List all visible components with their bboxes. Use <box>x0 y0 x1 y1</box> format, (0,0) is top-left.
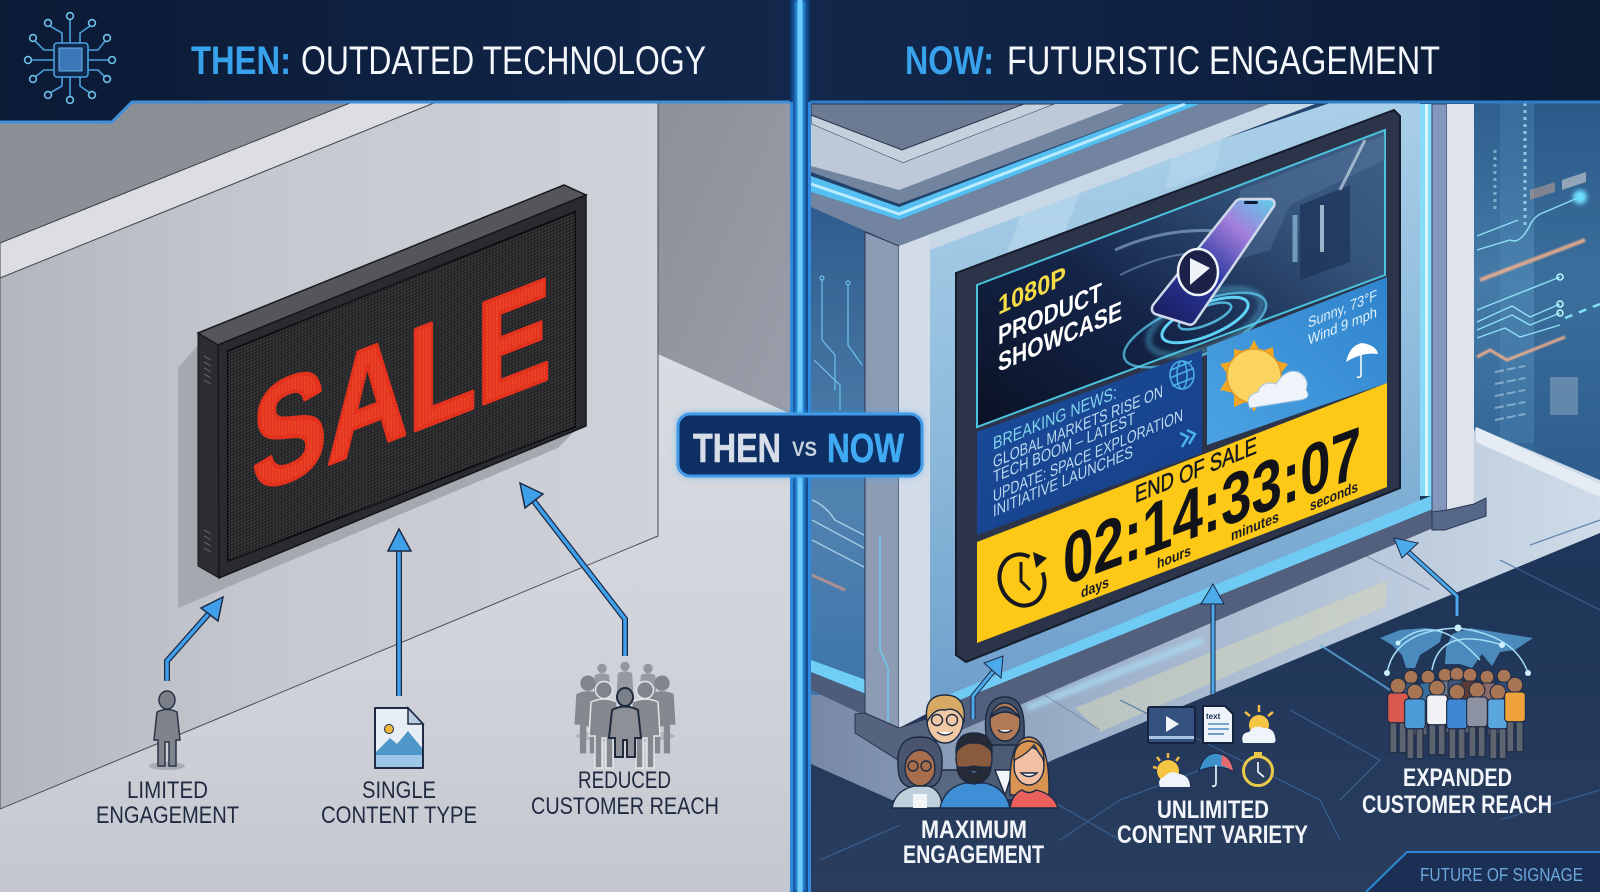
panel: breaking news: BREAKING NEWS: <box>993 382 1117 454</box>
icon: white umbrella <box>1346 343 1378 377</box>
floor circuit traces <box>820 520 1600 860</box>
label: single content type: CONTENT TYPE <box>321 802 477 829</box>
panel: countdown: 02:14:33:07 <box>1063 411 1361 601</box>
panel: product showcase <box>977 130 1385 427</box>
label: limited engagement: ENGAGEMENT <box>96 802 239 829</box>
label: maximum engagement: ENGAGEMENT <box>903 841 1044 869</box>
corridor structures <box>1115 135 1385 280</box>
sign shadow <box>178 190 586 608</box>
sign vents <box>204 356 211 552</box>
icon: video player <box>1148 707 1195 743</box>
panel: countdown: days <box>1081 574 1109 602</box>
main wall <box>0 103 658 809</box>
phone <box>1152 199 1274 325</box>
icon: reduced crowd <box>574 662 676 768</box>
label: expanded customer reach: CUSTOMER REACH <box>1362 791 1552 819</box>
icon: text document <box>1203 706 1233 743</box>
floor plate <box>811 427 1600 800</box>
label: expanded customer reach: EXPANDED <box>1403 764 1512 792</box>
panel: then (left scene) <box>0 100 791 892</box>
icon: single person <box>149 691 185 770</box>
footer tag: future of signage <box>1366 852 1600 892</box>
side recess wall <box>658 103 791 414</box>
label: reduced customer reach: REDUCED <box>578 767 671 794</box>
panel: breaking news <box>977 350 1202 535</box>
floating rings <box>1115 275 1275 383</box>
panel: countdown <box>977 383 1387 643</box>
person: left woman <box>892 737 942 808</box>
left pillar <box>855 232 945 760</box>
back wall upper <box>0 103 350 243</box>
right circuit glass panel <box>1474 103 1600 503</box>
person: right woman <box>1010 737 1058 808</box>
icon: single image file <box>375 708 423 768</box>
LED sale sign <box>198 185 586 578</box>
back wall <box>930 103 1420 730</box>
panel: countdown: minutes <box>1231 509 1279 545</box>
heading: then: THEN: <box>191 39 291 83</box>
panel: countdown: seconds <box>1310 479 1358 515</box>
arrow: single content type <box>388 529 411 696</box>
digital screen <box>956 110 1400 662</box>
ceiling <box>811 104 1315 250</box>
left circuit glass panel <box>811 205 866 716</box>
panel: countdown: hours <box>1157 542 1191 573</box>
showcase title: SHOWCASE <box>998 295 1122 378</box>
header: now <box>810 0 1600 102</box>
panel: breaking news: INITIATIVE LAUNCHES <box>993 441 1133 521</box>
badge: then vs now: VS <box>792 438 817 461</box>
icon: chevrons <box>1180 430 1195 447</box>
icon: sun cloud second <box>1153 753 1190 787</box>
label: maximum engagement: MAXIMUM <box>921 816 1027 844</box>
icon: world map and connections <box>1380 624 1533 676</box>
icon: sun and cloud <box>1220 340 1308 412</box>
header: then <box>0 0 790 122</box>
panel: weather: Sunny, 73°F <box>1308 287 1377 332</box>
panel: breaking news: UPDATE: SPACE EXPLORATION <box>993 405 1183 506</box>
icon: people group <box>892 695 1058 808</box>
label: single content type: SINGLE <box>362 777 436 804</box>
showcase title: 1080P <box>998 260 1066 321</box>
label: unlimited content variety: CONTENT VARIETY <box>1117 821 1308 849</box>
badge: then vs now: NOW <box>827 425 904 471</box>
arrow: maximum engagement <box>973 656 1003 719</box>
sale text: SALE <box>252 246 551 526</box>
panel: breaking news: GLOBAL MARKETS RISE ON <box>993 381 1163 472</box>
person: centre man <box>940 733 1010 808</box>
icon: globe <box>1170 361 1194 389</box>
right pillar <box>1420 104 1486 530</box>
arrow: reduced customer reach <box>520 483 625 656</box>
icon: expanded crowd <box>1388 667 1525 759</box>
arrow: limited engagement <box>167 597 223 681</box>
icon: stopwatch <box>1244 752 1272 786</box>
heading: now: FUTURISTIC ENGAGEMENT <box>1007 39 1440 83</box>
panel: breaking news: TECH BOOM – LATEST <box>993 408 1135 487</box>
wall stripe <box>0 103 434 278</box>
badge: then vs now <box>678 414 922 476</box>
icon: text document: text <box>1206 712 1221 721</box>
heading: now: NOW: <box>905 39 994 83</box>
icon: clock <box>992 548 1052 612</box>
wall base glow and fascia <box>943 495 1433 712</box>
showcase title: PRODUCT <box>998 276 1102 351</box>
panel: countdown: END OF SALE <box>1135 432 1257 509</box>
icon: circuit chip <box>25 13 115 103</box>
person: back man <box>926 695 964 743</box>
label: unlimited content variety: UNLIMITED <box>1157 796 1269 824</box>
icon: sun cloud small <box>1242 705 1276 743</box>
centre divider <box>790 0 811 892</box>
badge: then vs now: THEN <box>693 425 781 471</box>
arrow: expanded customer reach <box>1394 538 1457 616</box>
panel: now (right scene) <box>810 100 1600 892</box>
label: limited engagement: LIMITED <box>127 777 208 804</box>
panel: weather: Wind 9 mph <box>1308 304 1377 349</box>
icon: umbrella <box>1199 753 1233 786</box>
floor <box>0 354 791 892</box>
panel: weather <box>1207 277 1387 445</box>
person: back woman <box>985 697 1024 745</box>
heading: then: OUTDATED TECHNOLOGY <box>301 39 706 83</box>
label: reduced customer reach: CUSTOMER REACH <box>531 793 719 820</box>
arrow: unlimited content variety <box>1201 584 1224 694</box>
